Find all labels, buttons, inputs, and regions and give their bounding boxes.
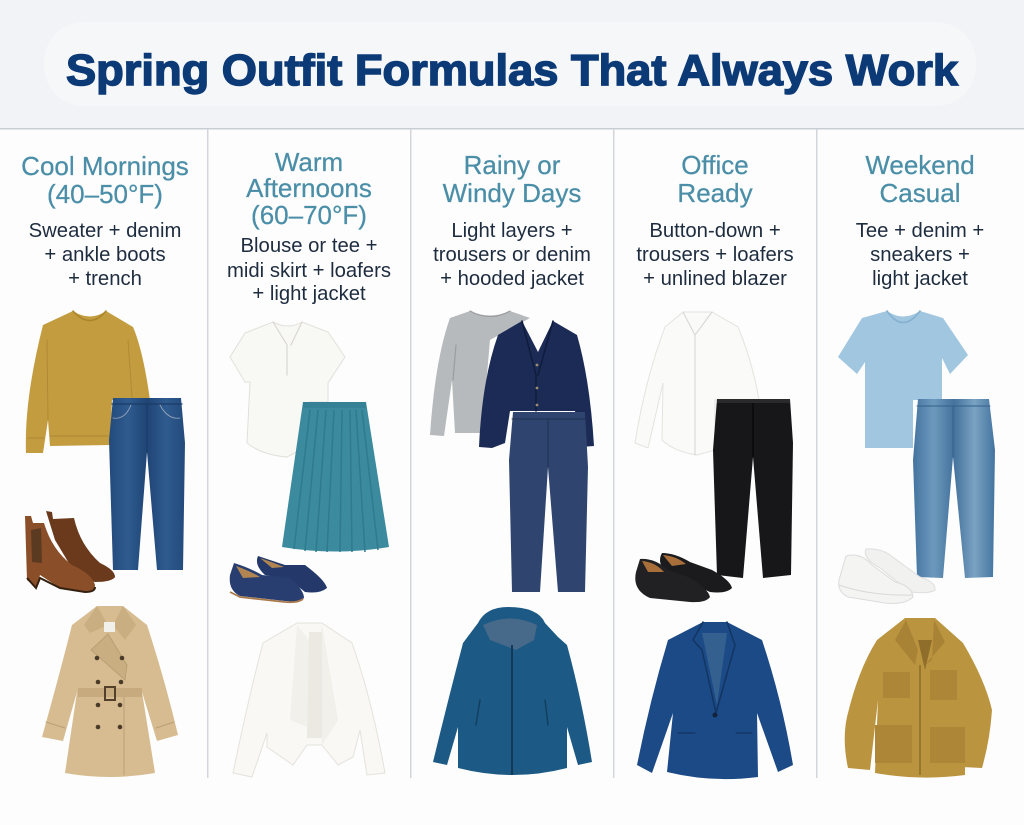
heading: rainy or windy days: Rainy or xyxy=(464,150,561,180)
icon: dark denim jeans xyxy=(109,398,185,570)
formula: rainy or windy days: Light layers + xyxy=(451,220,573,242)
formula: cool mornings xyxy=(29,220,181,290)
heading: cool mornings xyxy=(21,151,189,209)
icon: grey sweater xyxy=(430,311,530,436)
icon: light denim jeans xyxy=(913,399,995,578)
formula: office ready xyxy=(636,220,794,290)
title: Spring Outfit Formulas That Always Work xyxy=(66,46,959,95)
formula: weekend casual xyxy=(856,220,984,290)
formula: rainy or windy days: + hooded jacket xyxy=(440,268,584,290)
formula: cool mornings: Sweater + denim xyxy=(29,220,181,242)
heading: office ready: Ready xyxy=(677,178,753,208)
icon: blue hooded jacket xyxy=(433,607,592,775)
formula: weekend casual: light jacket xyxy=(872,268,968,290)
formula: warm afternoons: Blouse or tee + xyxy=(240,235,378,257)
icon: mustard utility jacket xyxy=(845,618,992,778)
formula: warm afternoons: midi skirt + loafers xyxy=(227,260,391,282)
heading: rainy or windy days xyxy=(443,150,581,208)
icon: navy trousers xyxy=(509,412,588,592)
heading: warm afternoons: Warm xyxy=(275,147,343,177)
heading: warm afternoons: (60–70°F) xyxy=(251,200,367,230)
formula: weekend casual: sneakers + xyxy=(870,244,970,266)
panel: rainy or windy days xyxy=(430,150,594,775)
formula: office ready: + unlined blazer xyxy=(643,268,787,290)
formula: office ready: Button-down + xyxy=(649,220,781,242)
icon: teal pleated skirt xyxy=(282,402,389,552)
formula: rainy or windy days xyxy=(433,220,591,290)
heading: weekend casual: Casual xyxy=(880,178,960,208)
icon: black trousers xyxy=(713,399,793,578)
panel: office ready xyxy=(635,150,794,779)
formula: rainy or windy days: trousers or denim xyxy=(433,244,591,266)
heading: rainy or windy days: Windy Days xyxy=(443,178,581,208)
icon: beige trench coat xyxy=(42,606,178,777)
heading: office ready: Office xyxy=(681,150,749,180)
panel: warm afternoons xyxy=(227,147,391,777)
heading: warm afternoons: Afternoons xyxy=(246,173,372,203)
heading: weekend casual xyxy=(865,150,975,208)
panel: cool mornings xyxy=(21,151,189,777)
header band xyxy=(0,0,1024,130)
heading: weekend casual: Weekend xyxy=(865,150,975,180)
formula: warm afternoons xyxy=(227,235,391,305)
icon: white sneakers xyxy=(839,549,935,603)
icon: white blazer xyxy=(233,623,385,777)
formula: warm afternoons: + light jacket xyxy=(252,283,366,305)
icon: light blue tee xyxy=(838,311,968,448)
formula: cool mornings: + ankle boots xyxy=(44,244,166,266)
icon: navy cardigan xyxy=(479,321,594,448)
heading: cool mornings: (40–50°F) xyxy=(47,179,163,209)
formula: weekend casual: Tee + denim + xyxy=(856,220,984,242)
heading: warm afternoons xyxy=(246,147,372,230)
icon: black loafers xyxy=(635,553,732,602)
icon: navy blazer xyxy=(637,622,793,779)
formula: cool mornings: + trench xyxy=(68,268,142,290)
heading: office ready xyxy=(677,150,753,208)
formula: office ready: trousers + loafers xyxy=(636,244,794,266)
icon: mustard sweater xyxy=(26,311,150,453)
icon: white blouse xyxy=(230,322,345,457)
heading: cool mornings: Cool Mornings xyxy=(21,151,189,181)
panel: weekend casual xyxy=(838,150,995,778)
icon: navy loafers xyxy=(230,556,327,602)
icon: brown ankle boots xyxy=(25,511,115,592)
icon: white button-down shirt xyxy=(635,312,759,455)
